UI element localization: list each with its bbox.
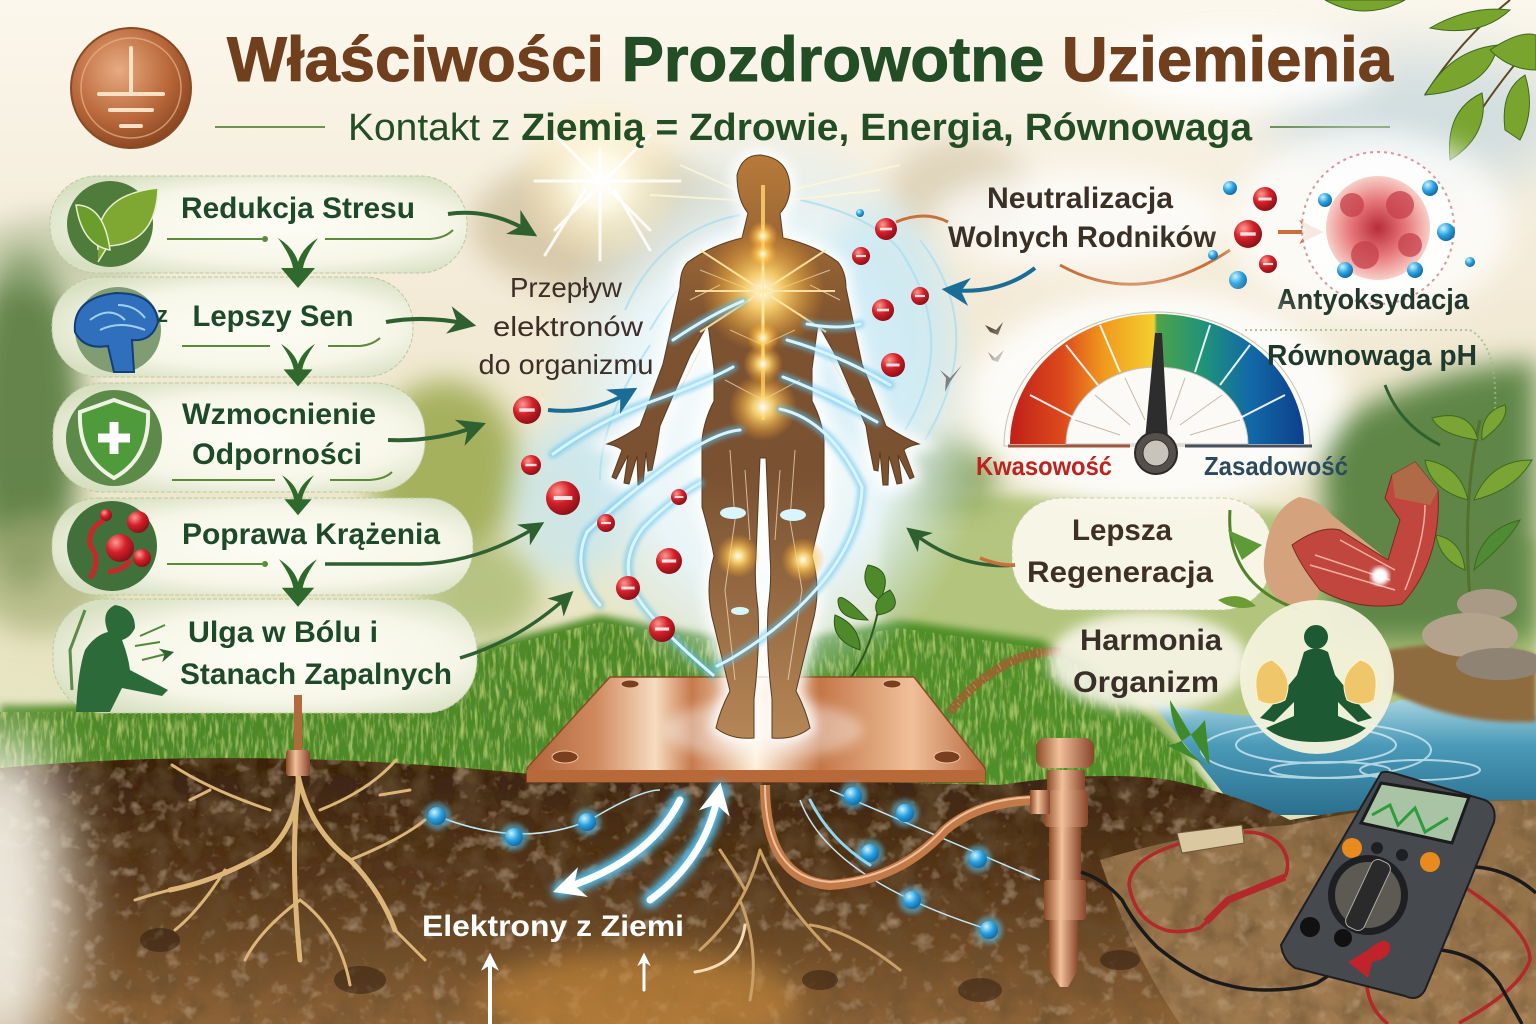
- benefit: Lepszy Sen: [52, 277, 468, 377]
- benefit: Redukcja Stresu: Redukcja Stresu: [181, 192, 415, 225]
- label: Lepsza Regeneracja: Lepsza: [1072, 514, 1172, 547]
- label: Przepływ elektronów: Przepływ: [510, 272, 623, 303]
- roots centre: [700, 850, 900, 1000]
- arrow: down 1: [278, 238, 318, 288]
- panel: benefits column: [50, 176, 568, 713]
- copper pipe and rod: [765, 738, 1094, 987]
- icon: grounding coin: [71, 28, 191, 148]
- birds: [940, 322, 1004, 392]
- leaves top right: [1325, 0, 1536, 160]
- benefit: Poprawa Krążenia: Poprawa Krążenia: [182, 518, 440, 551]
- benefit: Wzmocnienie Odporności: [53, 383, 478, 492]
- electron particles: [513, 209, 929, 642]
- multimeter and leads: [1081, 772, 1536, 1024]
- label: Neutralizacja Wolnych Rodników: Wolnych Rodników: [948, 221, 1217, 254]
- underground electrons: [423, 782, 1040, 944]
- label: Kwasowość: Kwasowość: [976, 451, 1112, 481]
- sun and aura: [510, 96, 990, 700]
- copper spike left: [286, 695, 310, 776]
- label: Przepływ elektronów: elektronów: [493, 311, 644, 342]
- label: Harmonia Organizm: [1048, 612, 1248, 766]
- label: Lepsza Regeneracja: [912, 498, 1272, 610]
- benefit: Redukcja Stresu: [50, 176, 530, 273]
- human figure: [607, 155, 919, 738]
- plant near plate: [834, 565, 895, 690]
- benefit: Wzmocnienie Odporności: Odporności: [192, 438, 362, 471]
- benefit: Ulga w Bólu: Stanach Zapalnych: [180, 658, 452, 691]
- label: Zasadowość: Zasadowość: [1204, 451, 1348, 481]
- chart: pH gauge: [967, 290, 1347, 510]
- label: Harmonia Organizm: Harmonia: [1080, 624, 1222, 657]
- plant right: [1422, 405, 1536, 680]
- label: Neutralizacja Wolnych Rodników: Neutralizacja: [987, 182, 1173, 215]
- title: Właściwości Prozdrowotne Uziemienia: [227, 25, 1394, 95]
- label: Przepływ elektronów: do organizmu: [478, 349, 654, 380]
- label: Równowaga pH: [1245, 330, 1495, 445]
- copper ground plate: [527, 652, 1062, 782]
- benefit: Wzmocnienie Odporności: Wzmocnienie: [182, 398, 376, 431]
- benefit: Ulga w Bólu: [53, 596, 568, 713]
- label: Elektrony z Ziemi: Elektrony z Ziemi: [422, 910, 684, 943]
- benefit: Lepszy Sen: Lepszy Sen: [192, 300, 354, 333]
- antioxidant illustration: [1208, 130, 1510, 320]
- benefit: Lepszy Sen: z: [157, 302, 168, 327]
- label: Neutralizacja Wolnych Rodników: [896, 170, 1230, 291]
- arrow: down 3: [282, 475, 314, 515]
- label: Antyoksydacja: Antyoksydacja: [1277, 284, 1470, 316]
- icon: flexed arm: [1218, 462, 1438, 610]
- electron swirls: [553, 301, 890, 675]
- label: Równowaga pH: Równowaga pH: [1267, 340, 1477, 372]
- icon: meditation: [1240, 600, 1394, 754]
- label: Lepsza Regeneracja: Regeneracja: [1027, 556, 1213, 589]
- benefit: Ulga w Bólu: Ulga w Bólu i: [188, 616, 378, 649]
- label: Przepływ elektronów: [478, 272, 654, 411]
- arrow: down 2: [281, 344, 315, 386]
- arrows: electrons rising: [490, 790, 870, 1024]
- glowing chakras: [695, 221, 835, 615]
- roots left: [135, 760, 425, 985]
- benefit: Poprawa Krążenia: [52, 498, 538, 595]
- label: Harmonia Organizm: Organizm: [1073, 666, 1219, 699]
- subtitle: Kontakt z Ziemią = Zdrowie, Energia, Równowaga: [348, 107, 1253, 149]
- arrow: down 4: [279, 559, 317, 607]
